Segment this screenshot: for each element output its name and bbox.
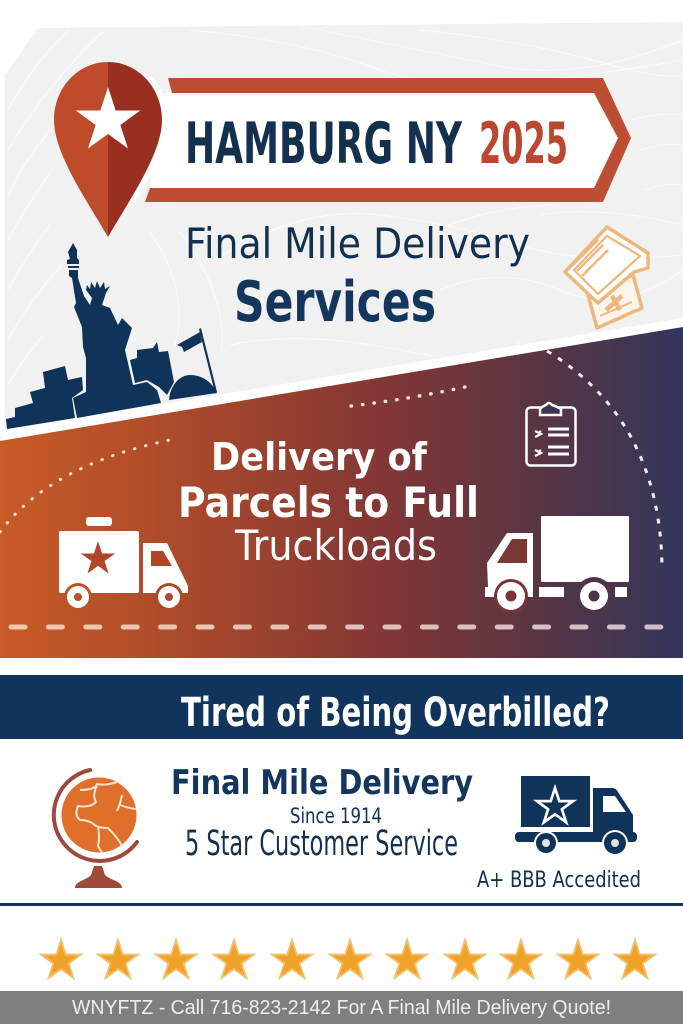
- text: Final Mile Delivery: Final Mile Delivery: [171, 763, 473, 803]
- icon: map pin with star: [54, 62, 162, 237]
- dome: [169, 375, 217, 400]
- dotted route left: [0, 440, 170, 532]
- banner: Tired of Being Overbilled: [0, 675, 683, 739]
- flag: [177, 332, 202, 352]
- left buildings: [6, 366, 83, 429]
- rating stars: [38, 937, 658, 980]
- panel: gradient delivery band: [0, 327, 683, 658]
- illustration: Statue of Liberty skyline: [6, 243, 217, 429]
- subtitle: Final Mile Delivery: Final Mile Delivery: [185, 219, 530, 268]
- heading: Parcels to Full: Parcels to Full: [178, 478, 479, 527]
- text: Since 1914: Since 1914: [290, 804, 382, 828]
- icon: globe: [54, 770, 137, 888]
- icon: navy truck with star: [515, 776, 637, 856]
- middle building: [130, 342, 174, 395]
- icon: passport and documents: [565, 227, 648, 328]
- heading: Delivery of: Delivery of: [211, 435, 427, 479]
- footer call to action: WNYFTZ - Call 716-823-2142 For A Final Mile Delivery Quote!: [72, 997, 611, 1019]
- panel: grey header background: [5, 22, 683, 430]
- statue: [67, 243, 161, 418]
- text: 5 Star Customer Service: 5 Star Customer Service: [185, 824, 458, 864]
- dotted route top: [351, 387, 465, 406]
- banner: Hamburg NY 2025: [145, 78, 631, 202]
- icon: large white truck: [485, 516, 629, 615]
- heading: Hamburg NY: HAMBURG NY: [185, 111, 462, 177]
- divider line: [0, 903, 683, 906]
- heading: 2025: 2025: [479, 111, 568, 177]
- footer call to action: [0, 991, 683, 1024]
- subtitle: Services: Services: [234, 270, 436, 335]
- road dashes: [11, 624, 673, 630]
- flag pole: [199, 328, 217, 393]
- dashed route right: [547, 351, 662, 567]
- icon: small white truck with star: [59, 517, 188, 611]
- heading: Truckloads: Truckloads: [234, 521, 437, 570]
- icon: clipboard checklist: [526, 403, 576, 466]
- text: A+ BBB Accredited: A+ BBB Accedited: [477, 868, 641, 893]
